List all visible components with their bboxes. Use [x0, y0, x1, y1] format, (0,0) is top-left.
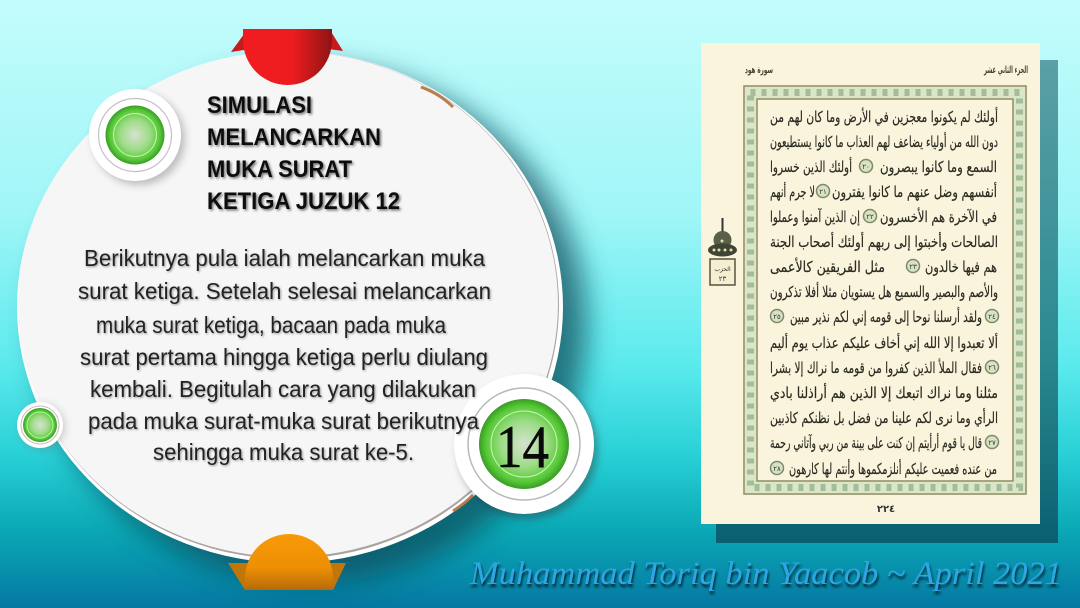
verse markers: ٢٣: [909, 263, 917, 271]
verse markers: ٢٧: [988, 439, 996, 447]
icon: top green badge: [89, 89, 185, 185]
body text: pada muka surat-muka surat berikutnya: [88, 408, 479, 434]
page headers: [745, 65, 1028, 76]
body text: kembali. Begitulah cara yang dilakukan: [90, 376, 476, 402]
number badge 14: [454, 374, 598, 519]
body text: [78, 245, 491, 465]
Arabic verse lines: الرأي وما نرى لكم علينا من فضل بل نظنكم كاذبين: [770, 408, 998, 428]
page drop shadow: [716, 60, 1058, 543]
heading: MELANCARKAN: [207, 124, 381, 151]
icon: small left green badge: [17, 402, 65, 450]
verse markers: [770, 160, 998, 474]
page frame border: [744, 86, 1026, 494]
verse markers: ٢٢: [866, 213, 874, 221]
Arabic verse lines: [770, 107, 998, 478]
Arabic verse lines: ألا تعبدوا إلا الله إني أخاف عليكم عذاب يوم أليم: [770, 333, 998, 353]
Arabic verse lines: مثل الفريقين كالأعمى: [770, 257, 885, 276]
red tab: [231, 29, 343, 85]
Arabic verse lines: أنفسهم وضل عنهم ما كانوا يفترون: [832, 182, 997, 201]
Arabic verse lines: أولئك الذين خسروا: [770, 157, 852, 176]
Arabic verse lines: السمع وما كانوا يبصرون: [880, 158, 997, 176]
verse markers: ٢٨: [773, 465, 781, 473]
body text: sehingga muka surat ke-5.: [153, 439, 414, 465]
body text: surat pertama hingga ketiga perlu diulang: [80, 344, 488, 370]
circle panel shadow: [37, 67, 587, 583]
Arabic verse lines: الصالحات وأخبتوا إلى ربهم أولئك أصحاب الجنة: [770, 232, 998, 251]
orange tab: [228, 534, 346, 590]
body text: Berikutnya pula ialah melancarkan muka: [84, 245, 485, 271]
body text: muka surat ketiga, bacaan pada muka: [96, 312, 446, 338]
verse markers: ٢٤: [988, 313, 996, 321]
signature: Muhammad Toriq bin Yaacob ~ April 2021: [469, 556, 1062, 592]
Arabic verse lines: مثلنا وما نراك اتبعك إلا الذين هم أراذلنا بادي: [770, 383, 998, 403]
verse markers: ٢٠: [862, 163, 870, 171]
page headers: الجزء الثاني عشر: [983, 65, 1028, 76]
page number: ٢٢٤: [877, 504, 895, 515]
Arabic verse lines: في الآخرة هم الأخسرون: [880, 207, 997, 227]
heading: KETIGA JUZUK 12: [207, 188, 400, 215]
number badge 14: 14: [496, 414, 549, 480]
heading: MUKA SURAT: [207, 156, 352, 183]
verse markers: ٢١: [819, 188, 827, 196]
Arabic verse lines: لا جرم أنهم: [770, 182, 815, 201]
hizb ornament: ٢٣: [719, 275, 726, 283]
hizb ornament: الحزب: [714, 266, 731, 273]
Arabic verse lines: هم فيها خالدون: [925, 258, 997, 276]
verse markers: ٢٥: [773, 313, 781, 321]
verse markers: ٢٦: [988, 364, 996, 372]
panel: Quran page: [469, 43, 1062, 592]
hizb ornament: [708, 218, 737, 285]
page headers: سورة هود: [745, 65, 773, 76]
Arabic verse lines: ولقد أرسلنا نوحا إلى قومه إني لكم نذير مبين: [790, 307, 982, 327]
Arabic verse lines: أولئك لم يكونوا معجزين في الأرض وما كان لهم من: [770, 107, 998, 127]
copper accents: [421, 87, 473, 511]
panel: main circle: [17, 51, 563, 563]
heading: [207, 92, 400, 215]
Arabic verse lines: فقال الملأ الذين كفروا من قومه ما نراك إلا بشرا: [770, 358, 982, 377]
Arabic verse lines: إن الذين آمنوا وعملوا: [770, 208, 860, 226]
heading: SIMULASI: [207, 92, 312, 119]
body text: surat ketiga. Setelah selesai melancarkan: [78, 278, 491, 304]
